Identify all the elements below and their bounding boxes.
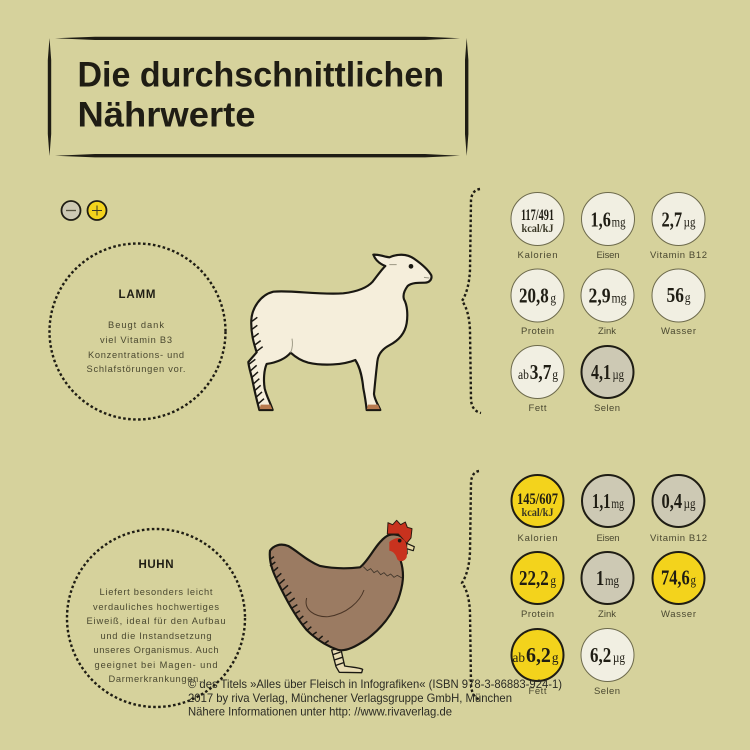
nutrient: Kalorien: 145/607	[517, 491, 558, 508]
nutrient: Vitamin B12	[650, 192, 707, 261]
nutrient: Selen: Selen	[594, 403, 620, 414]
panel: chicken description: und die Instandsetzung	[100, 631, 212, 641]
nutrient: Wasser	[652, 552, 704, 620]
copyright footer: Nähere Informationen unter http: //www.rivaverlag.de	[188, 704, 452, 718]
panel: chicken description: Darmerkrankungen.	[108, 674, 202, 684]
panel: lamb description: viel Vitamin B3	[100, 335, 172, 345]
nutrient: Fett: Fett	[528, 686, 547, 697]
nutrient: Vitamin B12: 2,7µg	[662, 208, 696, 232]
nutrient: Wasser	[652, 269, 705, 337]
nutrient: Protein: 20,8g	[519, 284, 556, 308]
nutrient: Zink: Zink	[598, 609, 616, 620]
brace: lamb	[462, 189, 481, 413]
icon: lamb	[248, 255, 432, 410]
nutrient: Zink: 2,9mg	[588, 284, 626, 308]
nutrient: Kalorien	[511, 192, 564, 261]
nutrient: Protein: Protein	[521, 609, 554, 620]
nutrient: Wasser: Wasser	[661, 326, 696, 337]
nutrient: Selen: 4,1µg	[591, 360, 624, 384]
nutrient: Selen: Selen	[594, 686, 620, 697]
nutrient: Zink	[581, 269, 634, 337]
nutrient: Selen: 6,2µg	[590, 643, 625, 667]
copyright footer: © des Titels »Alles über Fleisch in Infografiken« (ISBN 978-3-86883-924-1)	[188, 677, 562, 691]
nutrient: Fett: Fett	[528, 403, 547, 414]
nutrient: Protein	[512, 552, 564, 620]
nutrient: Wasser: 56g	[666, 283, 690, 307]
nutrient: Eisen: 1,6mg	[590, 208, 626, 232]
nutrient: Selen	[582, 346, 634, 414]
panel: lamb nutrients	[511, 192, 707, 414]
brace: chicken	[462, 471, 481, 700]
title frame	[48, 37, 468, 157]
nutrient: Fett	[512, 629, 564, 697]
nutrient: Vitamin B12: 0,4µg	[662, 489, 696, 513]
panel: chicken description: Liefert besonders leicht	[100, 587, 213, 597]
nutrient: Fett: ab6,2g	[512, 643, 558, 667]
panel: chicken nutrients	[512, 475, 707, 697]
panel: chicken description: verdauliches hochwertiges	[93, 602, 219, 612]
panel: chicken description: geeignet bei Magen- und	[94, 660, 218, 670]
panel: chicken description: Eiweiß, ideal für den Aufbau	[86, 616, 226, 626]
nutrient: Kalorien	[512, 475, 564, 544]
nutrient: Kalorien: Kalorien	[518, 250, 558, 261]
nutrient: Fett: ab3,7g	[518, 360, 558, 384]
nutrient: Vitamin B12: Vitamin B12	[650, 250, 707, 261]
nutrient: Eisen	[582, 475, 634, 544]
nutrient: Kalorien: 117/491	[521, 207, 554, 224]
panel: lamb description: Beugt dank	[108, 320, 164, 330]
nutrient: Eisen	[582, 192, 634, 261]
panel: chicken description: HUHN	[138, 559, 174, 571]
nutrient: Vitamin B12: Vitamin B12	[650, 533, 707, 544]
nutrient: Eisen: Eisen	[596, 250, 620, 261]
icon: chicken	[269, 520, 414, 673]
nutrient: Zink: 1mg	[596, 566, 619, 590]
panel: lamb description: Konzentrations- und	[88, 350, 184, 360]
panel: lamb description: Schlafstörungen vor.	[86, 364, 186, 374]
nutrient: Protein: Protein	[521, 326, 554, 337]
nutrient: Zink: Zink	[598, 326, 616, 337]
copyright footer: 2017 by riva Verlag, Münchener Verlagsgruppe GmbH, München	[188, 691, 512, 705]
legend: minus and plus	[62, 201, 106, 220]
nutrient: Protein: 22,2g	[519, 566, 556, 590]
nutrient: Vitamin B12	[650, 475, 707, 544]
copyright footer	[188, 677, 562, 718]
panel: chicken description: unseres Organismus. Auch	[94, 645, 218, 655]
title: Die durchschnittlichen	[78, 56, 444, 95]
nutrient: Kalorien: kcal/kJ	[522, 505, 554, 519]
nutrient: Protein	[511, 269, 564, 337]
nutrient: Eisen: 1,1mg	[592, 489, 624, 513]
nutrient: Fett	[511, 346, 564, 414]
title	[78, 56, 444, 135]
panel: lamb description: LAMM	[118, 289, 156, 301]
panel: chicken description	[67, 529, 245, 707]
nutrient: Eisen: Eisen	[596, 533, 620, 544]
title: Nährwerte	[78, 96, 255, 135]
nutrient: Selen	[581, 628, 634, 697]
nutrient: Wasser: 74,6g	[661, 566, 696, 590]
panel: lamb description	[50, 244, 226, 420]
nutrient: Kalorien: kcal/kJ	[522, 221, 554, 235]
nutrient: Wasser: Wasser	[661, 609, 696, 620]
nutrient: Kalorien: Kalorien	[518, 533, 558, 544]
nutrient: Zink	[582, 552, 634, 620]
